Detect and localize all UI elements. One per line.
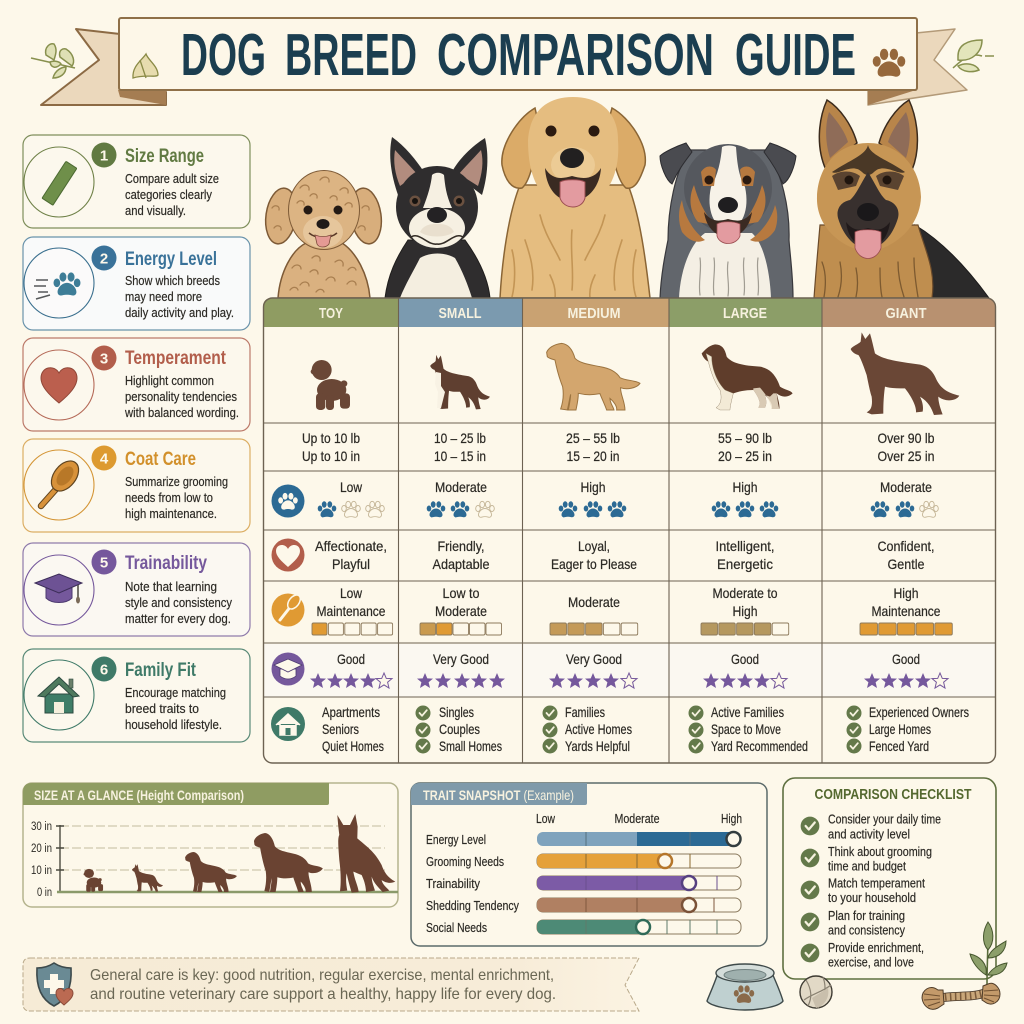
description: style and consistency bbox=[125, 596, 233, 610]
heading: Trainability bbox=[125, 553, 207, 574]
row: weight and height: 55 – 90 lb bbox=[718, 430, 772, 446]
trait: trainability bbox=[426, 876, 741, 891]
bar chart: height axis: 20 in bbox=[31, 843, 52, 855]
heading bbox=[411, 783, 587, 805]
number badge: 4 bbox=[100, 450, 109, 468]
row: coat care: Maintenance bbox=[872, 603, 941, 619]
dog: german shepherd bbox=[814, 100, 989, 298]
heading: COMPARISON CHECKLIST bbox=[814, 787, 972, 803]
heading: TRAIT SNAPSHOT (Example) bbox=[423, 787, 574, 803]
row: energy: High bbox=[732, 479, 758, 495]
description: Highlight common bbox=[125, 374, 214, 388]
description: Show which breeds bbox=[125, 274, 220, 288]
row: family fit: Apartments bbox=[322, 704, 380, 720]
check items: Consider your daily time bbox=[828, 812, 941, 826]
row: temperament: Affectionate, bbox=[315, 538, 387, 554]
row: coat care: Moderate bbox=[568, 594, 620, 610]
description bbox=[125, 580, 233, 626]
icon: medium silhouette bbox=[547, 343, 640, 410]
large dog silhouette bbox=[254, 833, 323, 892]
icon: family fit bbox=[271, 707, 305, 741]
description: and visually. bbox=[125, 204, 186, 218]
title bbox=[181, 22, 856, 88]
icon: temperament bbox=[272, 538, 304, 572]
row: trainability bbox=[272, 651, 948, 688]
panel: trainability bbox=[23, 543, 250, 636]
row: family fit: Couples bbox=[439, 721, 480, 737]
row: family fit: Experienced Owners bbox=[869, 704, 969, 720]
dog: golden retriever bbox=[500, 97, 650, 298]
description: matter for every dog. bbox=[125, 612, 231, 626]
row: coat care: Low to bbox=[442, 585, 480, 601]
row: weight and height bbox=[302, 430, 935, 464]
description bbox=[124, 374, 239, 420]
icon: heart bbox=[41, 368, 77, 403]
row: weight and height: 10 – 25 lb bbox=[434, 430, 486, 446]
row: weight and height: Up to 10 in bbox=[302, 448, 360, 464]
icon: coat care bbox=[272, 593, 304, 626]
dog: boston terrier bbox=[385, 137, 490, 298]
dog portrait row bbox=[262, 97, 989, 298]
description bbox=[125, 475, 228, 521]
panel: family fit bbox=[23, 649, 250, 742]
check items: Plan for training bbox=[828, 909, 905, 923]
row: energy: High bbox=[580, 479, 606, 495]
check marks bbox=[416, 706, 862, 754]
icon: brush bbox=[41, 456, 84, 506]
scale labels: Low bbox=[536, 812, 556, 826]
check items: Match temperament bbox=[828, 876, 925, 890]
panel: coat care bbox=[23, 439, 250, 532]
row: weight and height: 20 – 25 in bbox=[718, 448, 772, 464]
number badge bbox=[92, 142, 116, 168]
number badge: 6 bbox=[100, 662, 108, 678]
scale labels bbox=[536, 812, 742, 826]
row: family fit: Families bbox=[565, 704, 605, 720]
description: Note that learning bbox=[125, 580, 217, 594]
toy dog silhouette bbox=[84, 869, 103, 892]
trait: shedding tendency: Shedding Tendency bbox=[426, 899, 520, 913]
row: trainability: Good bbox=[892, 651, 920, 667]
scale labels: Moderate bbox=[614, 812, 660, 826]
row: weight and height: 10 – 15 in bbox=[434, 448, 486, 464]
row: temperament: Confident, bbox=[878, 538, 934, 554]
table header: LARGE bbox=[723, 305, 767, 322]
trait: energy level bbox=[426, 832, 741, 847]
table header bbox=[263, 298, 995, 327]
row: family fit: Quiet Homes bbox=[322, 738, 384, 754]
number badge bbox=[92, 346, 116, 370]
description: breed traits to bbox=[125, 702, 199, 716]
row: coat care: Moderate bbox=[435, 603, 487, 619]
row: weight and height: 15 – 20 in bbox=[566, 448, 620, 464]
row: family fit: Large Homes bbox=[869, 721, 931, 737]
number badge bbox=[92, 446, 116, 470]
icon: ball bbox=[800, 976, 832, 1008]
check items: exercise, and love bbox=[828, 956, 914, 970]
title: GUIDE bbox=[735, 22, 856, 88]
icon: house bbox=[38, 677, 79, 713]
table header: TOY bbox=[319, 305, 343, 322]
number badge bbox=[92, 656, 116, 682]
trait: social needs: Social Needs bbox=[426, 921, 487, 935]
heading: Size Range bbox=[125, 146, 204, 167]
callout text bbox=[90, 967, 556, 1003]
row: temperament: Friendly, bbox=[438, 538, 484, 554]
row: temperament bbox=[272, 538, 934, 572]
description bbox=[125, 686, 226, 732]
row: coat care: High bbox=[732, 603, 758, 619]
row: trainability: Good bbox=[337, 651, 365, 667]
row: weight and height: Over 90 lb bbox=[878, 430, 935, 446]
icon: paw bbox=[873, 49, 905, 77]
icon: graduation cap bbox=[35, 574, 82, 604]
row: family fit: Small Homes bbox=[439, 738, 502, 754]
description: personality tendencies bbox=[125, 390, 237, 404]
row: family fit: Yards Helpful bbox=[565, 738, 630, 754]
icon: small silhouette bbox=[430, 355, 490, 409]
row: energy bbox=[272, 479, 938, 518]
panel: temperament bbox=[23, 338, 250, 431]
panel: size at a glance bbox=[23, 783, 398, 907]
row: temperament: Intelligent, bbox=[716, 538, 774, 554]
row: family fit: Yard Recommended bbox=[711, 738, 808, 754]
grooming meters bbox=[312, 623, 952, 635]
row: energy: Low bbox=[340, 479, 363, 495]
row: temperament: Eager to Please bbox=[551, 556, 637, 572]
icon: large silhouette bbox=[702, 344, 793, 410]
title: DOG bbox=[181, 22, 266, 88]
scale labels: High bbox=[721, 812, 742, 826]
row: family fit: Fenced Yard bbox=[869, 738, 929, 754]
row: temperament: Adaptable bbox=[432, 556, 490, 572]
number badge: 3 bbox=[100, 350, 108, 368]
row: family fit: Singles bbox=[439, 704, 474, 720]
icon: right sprig bbox=[953, 40, 994, 72]
icon: rope toy bbox=[922, 983, 1000, 1009]
bar chart: height axis bbox=[31, 821, 398, 899]
icon: giant silhouette bbox=[851, 332, 959, 415]
icon: trainability bbox=[272, 652, 304, 686]
table header: MEDIUM bbox=[568, 305, 620, 322]
row: trainability: Very Good bbox=[433, 651, 489, 667]
icon: energy bbox=[272, 484, 304, 518]
row: temperament: Gentle bbox=[888, 556, 925, 572]
check items: and activity level bbox=[828, 828, 910, 842]
description: with balanced wording. bbox=[124, 406, 239, 420]
table header: SMALL bbox=[438, 305, 482, 322]
row: weight and height: 25 – 55 lb bbox=[566, 430, 620, 446]
number badge: 2 bbox=[100, 250, 108, 268]
number badge: 1 bbox=[100, 148, 108, 164]
left ribbon bbox=[41, 29, 166, 105]
icon: left leaf on banner bbox=[133, 54, 158, 78]
title: COMPARISON bbox=[437, 22, 714, 88]
table header: GIANT bbox=[886, 305, 926, 322]
row: weight and height: Over 25 in bbox=[878, 448, 934, 464]
title: BREED bbox=[285, 22, 417, 88]
icon: left sprig bbox=[31, 44, 75, 78]
icon: plant bbox=[970, 922, 1007, 985]
number badge bbox=[92, 246, 116, 270]
description: categories clearly bbox=[125, 188, 213, 202]
heading: Family Fit bbox=[125, 660, 197, 681]
description: Summarize grooming bbox=[125, 475, 228, 489]
trait: shedding tendency bbox=[426, 898, 741, 913]
row: silhouettes bbox=[311, 332, 959, 415]
row: coat care: Maintenance bbox=[316, 603, 386, 619]
panel: size range bbox=[23, 135, 250, 228]
row: family fit bbox=[271, 704, 969, 754]
medium dog silhouette bbox=[185, 852, 237, 892]
check items: time and budget bbox=[828, 860, 906, 874]
heading: Energy Level bbox=[125, 249, 217, 270]
description: Encourage matching bbox=[125, 686, 226, 700]
row: coat care: High bbox=[894, 585, 918, 601]
description bbox=[125, 172, 219, 218]
icon: ruler bbox=[42, 161, 77, 205]
trait: grooming needs: Grooming Needs bbox=[426, 855, 504, 869]
row: energy: Moderate bbox=[435, 479, 487, 495]
bar chart: height axis: 10 in bbox=[31, 865, 52, 877]
description: Compare adult size bbox=[125, 172, 219, 186]
trait: social needs bbox=[426, 920, 741, 935]
row: weight and height: Up to 10 lb bbox=[302, 430, 360, 446]
banner panel bbox=[119, 18, 917, 90]
description: may need more bbox=[125, 290, 202, 304]
star ratings bbox=[310, 673, 931, 688]
check items bbox=[801, 812, 941, 970]
row: temperament: Playful bbox=[332, 556, 370, 572]
description bbox=[125, 274, 234, 320]
row: trainability: Very Good bbox=[566, 651, 622, 667]
description: needs from low to bbox=[125, 491, 213, 505]
dog: australian shepherd bbox=[660, 143, 796, 298]
panel: comparison checklist bbox=[783, 778, 996, 979]
check items: to your household bbox=[828, 891, 916, 905]
description: daily activity and play. bbox=[125, 306, 234, 320]
row: temperament: Energetic bbox=[717, 556, 773, 572]
trait: trainability: Trainability bbox=[426, 877, 481, 891]
panel: energy level bbox=[23, 237, 250, 330]
row: family fit: Seniors bbox=[322, 721, 359, 737]
check items: and consistency bbox=[828, 924, 906, 938]
heading: Coat Care bbox=[125, 449, 196, 470]
row: family fit: Active Homes bbox=[565, 721, 632, 737]
callout: general care bbox=[23, 958, 639, 1011]
description: high maintenance. bbox=[125, 507, 217, 521]
panel: feature list bbox=[23, 135, 250, 742]
right ribbon bbox=[868, 29, 967, 105]
icon: running paw bbox=[34, 272, 80, 299]
dog: poodle bbox=[262, 170, 385, 298]
row: energy: Moderate bbox=[880, 479, 932, 495]
row: temperament: Loyal, bbox=[578, 538, 610, 554]
row: trainability: Good bbox=[731, 651, 759, 667]
bar chart: height axis: 30 in bbox=[31, 821, 52, 833]
trait: grooming needs bbox=[426, 854, 741, 869]
row: coat care: Low bbox=[340, 585, 363, 601]
small dog silhouette bbox=[132, 864, 163, 892]
heading bbox=[23, 783, 329, 805]
callout text: General care is key: good nutrition, regular exercise, mental enrichment, bbox=[90, 967, 554, 984]
row: coat care: Moderate to bbox=[712, 585, 778, 601]
giant dog silhouette bbox=[337, 814, 395, 893]
panel: trait snapshot bbox=[411, 783, 767, 946]
paw ratings bbox=[318, 501, 914, 517]
comparison table bbox=[263, 298, 996, 763]
callout text: and routine veterinary care support a healthy, happy life for every dog. bbox=[90, 986, 556, 1003]
row: coat care bbox=[272, 585, 952, 635]
title banner bbox=[31, 18, 994, 105]
row: family fit: Active Families bbox=[711, 704, 784, 720]
trait: energy level: Energy Level bbox=[426, 833, 486, 847]
number badge bbox=[92, 550, 116, 574]
number badge: 5 bbox=[100, 554, 108, 572]
icon: shield bbox=[37, 963, 73, 1006]
icon: water bowl bbox=[707, 964, 783, 1010]
bar chart: height axis: 0 in bbox=[37, 887, 52, 899]
check items: Provide enrichment, bbox=[828, 941, 924, 955]
check items: Think about grooming bbox=[828, 845, 932, 859]
icon: toy silhouette bbox=[311, 360, 350, 410]
heading: Temperament bbox=[125, 348, 227, 369]
description: household lifestyle. bbox=[125, 718, 222, 732]
heading: SIZE AT A GLANCE (Height Comparison) bbox=[34, 787, 244, 803]
row: family fit: Space to Move bbox=[711, 721, 781, 737]
